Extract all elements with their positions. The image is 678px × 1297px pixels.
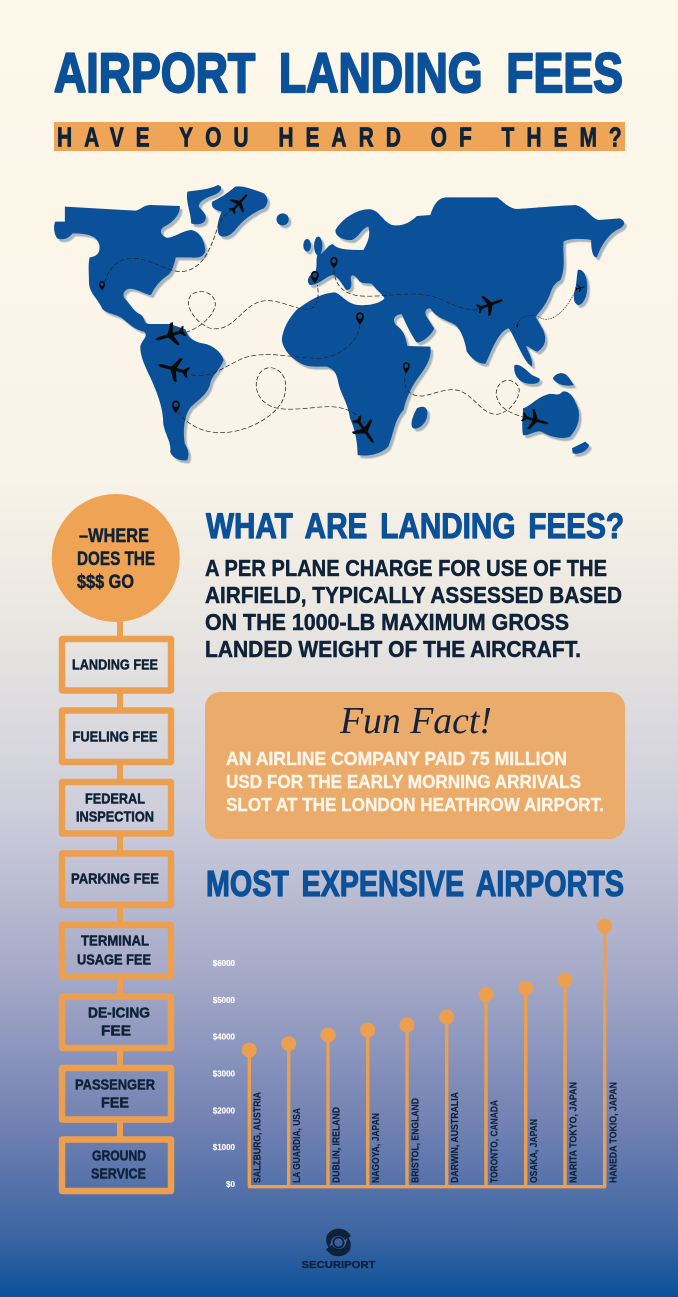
circle heading: –WHERE bbox=[79, 526, 149, 547]
panel: fun fact: SLOT AT THE LONDON HEATHROW AIRPORT. bbox=[226, 795, 604, 815]
y axis labels: $5000 bbox=[213, 996, 236, 1005]
y axis labels: $4000 bbox=[213, 1032, 236, 1042]
y axis labels: $6000 bbox=[213, 959, 236, 968]
logo: Securiport: SECURIPORT bbox=[302, 1259, 376, 1271]
circle heading bbox=[52, 494, 180, 622]
y axis labels: $1000 bbox=[213, 1143, 236, 1152]
airport labels: TORONTO, CANADA bbox=[490, 1100, 500, 1183]
panel: fun fact: AN AIRLINE COMPANY PAID 75 MILLION bbox=[226, 749, 567, 769]
fee box: ground service: GROUND bbox=[92, 1148, 146, 1164]
fee box: federal inspection: FEDERAL bbox=[85, 790, 145, 808]
fee box: ground service: SERVICE bbox=[91, 1166, 146, 1182]
fee box: passenger fee: FEE bbox=[101, 1094, 129, 1112]
fee box: landing fee bbox=[62, 639, 171, 690]
fee box: terminal usage fee: TERMINAL bbox=[81, 932, 149, 950]
fee box: terminal usage fee bbox=[62, 925, 171, 976]
airport labels: NARITA TOKYO, JAPAN bbox=[568, 1082, 580, 1183]
lollipop chart bbox=[213, 918, 620, 1189]
stems and markers bbox=[242, 918, 612, 1187]
baseline bbox=[248, 1185, 606, 1188]
airport labels: NAGOYA, JAPAN bbox=[371, 1113, 382, 1183]
connector lines bbox=[117, 620, 123, 1137]
airport labels: HANEDA TOKIO, JAPAN bbox=[608, 1082, 620, 1183]
definition text: A PER PLANE CHARGE FOR USE OF THE bbox=[205, 555, 607, 581]
fee box: federal inspection bbox=[62, 782, 171, 834]
airport labels: DARWIN, AUSTRALIA bbox=[450, 1092, 461, 1183]
world map with flight routes bbox=[54, 185, 627, 463]
logo: Securiport bbox=[302, 1229, 376, 1271]
airport labels: DUBLIN, IRELAND bbox=[332, 1107, 342, 1183]
fee box: passenger fee bbox=[62, 1068, 171, 1120]
y axis labels: $3000 bbox=[213, 1070, 236, 1078]
circle heading: DOES THE bbox=[77, 549, 155, 570]
fee box: parking fee: PARKING FEE bbox=[71, 870, 159, 888]
definition text: LANDED WEIGHT OF THE AIRCRAFT. bbox=[205, 636, 581, 662]
airport labels: LA GUARDIA, USA bbox=[292, 1108, 303, 1183]
panel: fun fact: USD FOR THE EARLY MORNING ARRIVALS bbox=[226, 772, 581, 792]
continents bbox=[54, 185, 624, 460]
y axis labels bbox=[213, 959, 236, 1189]
fee box: parking fee bbox=[62, 854, 171, 905]
definition text: AIRFIELD, TYPICALLY ASSESSED BASED bbox=[205, 582, 622, 608]
definition text bbox=[205, 555, 622, 662]
fee box: fueling fee bbox=[62, 710, 171, 762]
airport labels: OSAKA, JAPAN bbox=[529, 1119, 540, 1183]
airport labels: SALZBURG, AUSTRIA bbox=[252, 1092, 264, 1183]
circle heading: $$$ GO bbox=[77, 572, 134, 593]
airport labels bbox=[252, 1082, 620, 1183]
fee box: passenger fee: PASSENGER bbox=[75, 1076, 155, 1094]
panel: fun fact: Fun Fact! bbox=[339, 700, 492, 742]
fee box: landing fee: LANDING FEE bbox=[72, 656, 158, 674]
fee box: terminal usage fee: USAGE FEE bbox=[77, 952, 151, 968]
fee box: ground service bbox=[62, 1140, 171, 1191]
fee box: federal inspection: INSPECTION bbox=[76, 808, 154, 826]
fee box: de-icing fee: FEE bbox=[101, 1022, 131, 1040]
y axis labels: $0 bbox=[226, 1180, 236, 1189]
airplane icons bbox=[153, 188, 586, 449]
y axis labels: $2000 bbox=[213, 1106, 236, 1116]
subtitle banner: HAVE YOU HEARD OF THEM? bbox=[57, 123, 622, 153]
panel: fun fact bbox=[205, 692, 625, 839]
definition text: ON THE 1000-LB MAXIMUM GROSS bbox=[205, 609, 569, 635]
map shadow bbox=[57, 188, 627, 463]
fee box: fueling fee: FUELING FEE bbox=[72, 728, 158, 746]
airport labels: BRISTOL, ENGLAND bbox=[410, 1098, 422, 1183]
dashed flight routes bbox=[103, 208, 576, 433]
location pins bbox=[99, 257, 518, 413]
fee box: de-icing fee bbox=[62, 996, 171, 1048]
fee box: de-icing fee: DE-ICING bbox=[88, 1004, 150, 1022]
flow chart: where does the money go bbox=[52, 494, 180, 1191]
